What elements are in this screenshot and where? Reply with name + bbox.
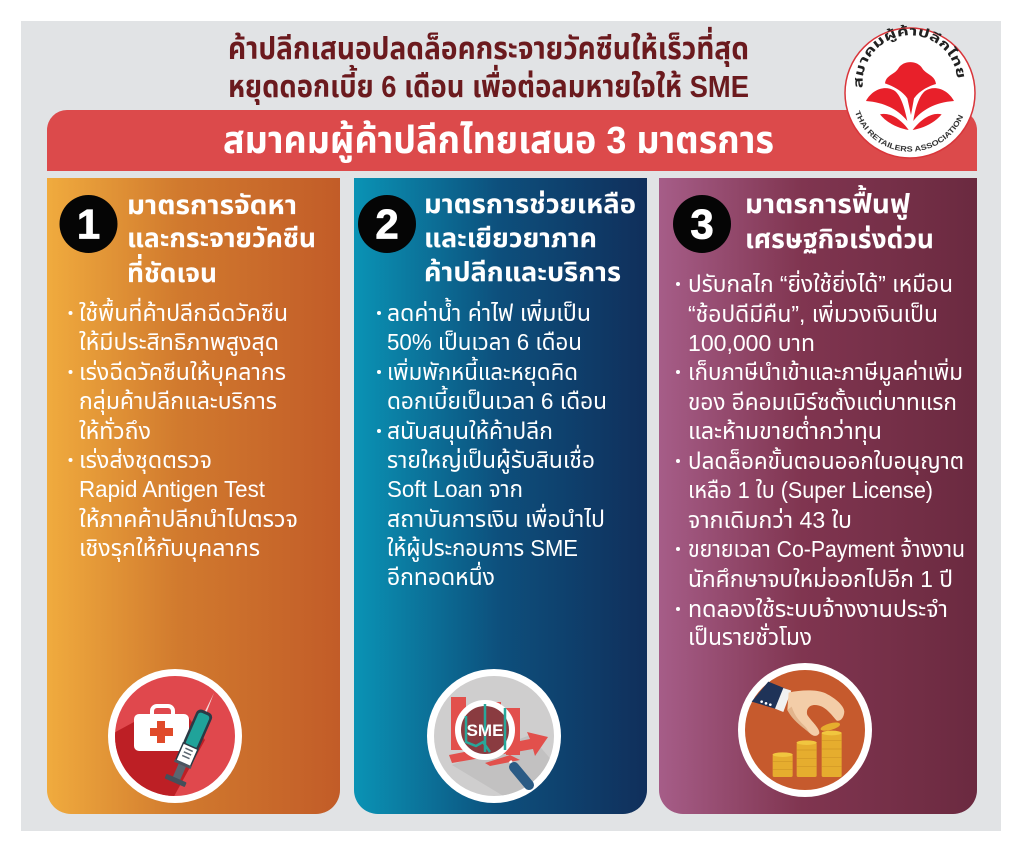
list 2: Soft Loan จาก — [387, 476, 523, 502]
list 1: Rapid Antigen Test — [79, 476, 266, 502]
list 2: ลดค่าน้ำ ค่าไฟ เพิ่มเป็น — [387, 297, 591, 326]
heading 1: ที่ชัดเจน — [127, 254, 217, 288]
icon: SME magnifier — [427, 669, 561, 803]
list 3: เก็บภาษีนำเข้าและภาษีมูลค่าเพิ่ม — [688, 357, 963, 387]
logo: Thai Retailers Association: สมาคมผู้ค้าปลีกไทย — [855, 24, 964, 88]
panel 2: relief measures — [354, 178, 647, 814]
number badge 3: 3 — [690, 200, 714, 248]
list 2: ให้ผู้ประกอบการ SME — [387, 535, 578, 563]
list 2: สนับสนุนให้ค้าปลีก — [387, 418, 553, 445]
list 3: และห้ามขายต่ำกว่าทุน — [688, 415, 882, 445]
list 3: ทดลองใช้ระบบจ้างงานประจำ — [688, 596, 948, 622]
number badge 2: 2 — [375, 200, 399, 248]
title — [228, 26, 749, 105]
list 2: รายใหญ่เป็นผู้รับสินเชื่อ — [387, 444, 595, 475]
heading 2 — [424, 189, 636, 287]
list 2: สถาบันการเงิน เพื่อนำไป — [387, 503, 605, 532]
list 3: นักศึกษาจบใหม่ออกไปอีก 1 ปี — [688, 566, 953, 592]
number badge 1 — [60, 195, 118, 253]
heading 3: มาตรการฟื้นฟู — [745, 185, 911, 220]
icon: SME magnifier: SME — [467, 721, 503, 740]
heading 2: มาตรการช่วยเหลือ — [424, 189, 636, 219]
list 1: ให้มีประสิทธิภาพสูงสุด — [79, 329, 279, 357]
icon: first aid kit and syringe — [108, 669, 242, 803]
list 1: ให้ภาคค้าปลีกนำไปตรวจ — [79, 506, 298, 532]
number badge 3 — [673, 195, 731, 253]
title: หยุดดอกเบี้ย 6 เดือน เพื่อต่อลมหายใจให้ SME — [228, 64, 749, 105]
list 2: อีกทอดหนึ่ง — [387, 561, 495, 590]
list 2: เพิ่มพักหนี้และหยุดคิด — [387, 356, 578, 386]
heading 3: เศรษฐกิจเร่งด่วน — [745, 224, 934, 254]
heading 1: และกระจายวัคซีน — [127, 223, 316, 253]
heading 1: มาตรการจัดหา — [127, 190, 297, 220]
title: ค้าปลีกเสนอปลดล็อคกระจายวัคซีนให้เร็วที่สุด — [228, 26, 749, 67]
heading 2: ค้าปลีกและบริการ — [424, 257, 621, 287]
banner — [47, 110, 977, 171]
list 3: เหลือ 1 ใบ (Super License) — [688, 477, 933, 503]
list 1: เร่งส่งชุดตรวจ — [79, 447, 212, 474]
list 1: เชิงรุกให้กับบุคลากร — [79, 535, 260, 562]
banner: สมาคมผู้ค้าปลีกไทยเสนอ 3 มาตรการ — [223, 120, 774, 163]
number badge 2 — [358, 195, 416, 253]
list 1: เร่งฉีดวัคซีนให้บุคลากร — [79, 359, 286, 386]
list 3: ปลดล็อคขั้นตอนออกใบอนุญาต — [688, 446, 964, 475]
list 3: 100,000 บาท — [688, 330, 815, 356]
logo: Thai Retailers Association: THAI RETAILERS ASSOCIATION — [856, 110, 964, 152]
logo: Thai Retailers Association — [844, 24, 976, 159]
number badge 1: 1 — [77, 200, 100, 248]
list 3: “ช้อปดีมีคืน”, เพิ่มวงเงินเป็น — [688, 299, 938, 327]
list 3: ขยายเวลา Co-Payment จ้างงาน — [688, 536, 965, 562]
list 3: ปรับกลไก “ยิ่งใช้ยิ่งได้” เหมือน — [688, 269, 953, 297]
list 1: ให้ทั่วถึง — [79, 416, 151, 444]
panel 3: economic recovery measures — [659, 178, 977, 814]
icon: hand stacking coins — [738, 663, 872, 797]
list 3: ของ อีคอมเมิร์ซตั้งแต่บาทแรก — [688, 387, 957, 415]
heading 1 — [127, 190, 316, 288]
list 2: ดอกเบี้ยเป็นเวลา 6 เดือน — [387, 385, 607, 414]
list 3: จากเดิมกว่า 43 ใบ — [688, 507, 852, 533]
list 3: เป็นรายชั่วโมง — [688, 622, 812, 650]
list 3 — [676, 269, 965, 650]
panel 1: vaccine measures — [47, 178, 340, 814]
heading 3 — [745, 185, 934, 254]
list 2 — [377, 297, 607, 590]
list 1 — [68, 297, 298, 562]
list 1: ใช้พื้นที่ค้าปลีกฉีดวัคซีน — [79, 297, 288, 326]
list 2: 50% เป็นเวลา 6 เดือน — [387, 329, 582, 355]
heading 2: และเยียวยาภาค — [424, 223, 597, 253]
list 1: กลุ่มค้าปลีกและบริการ — [79, 388, 277, 415]
